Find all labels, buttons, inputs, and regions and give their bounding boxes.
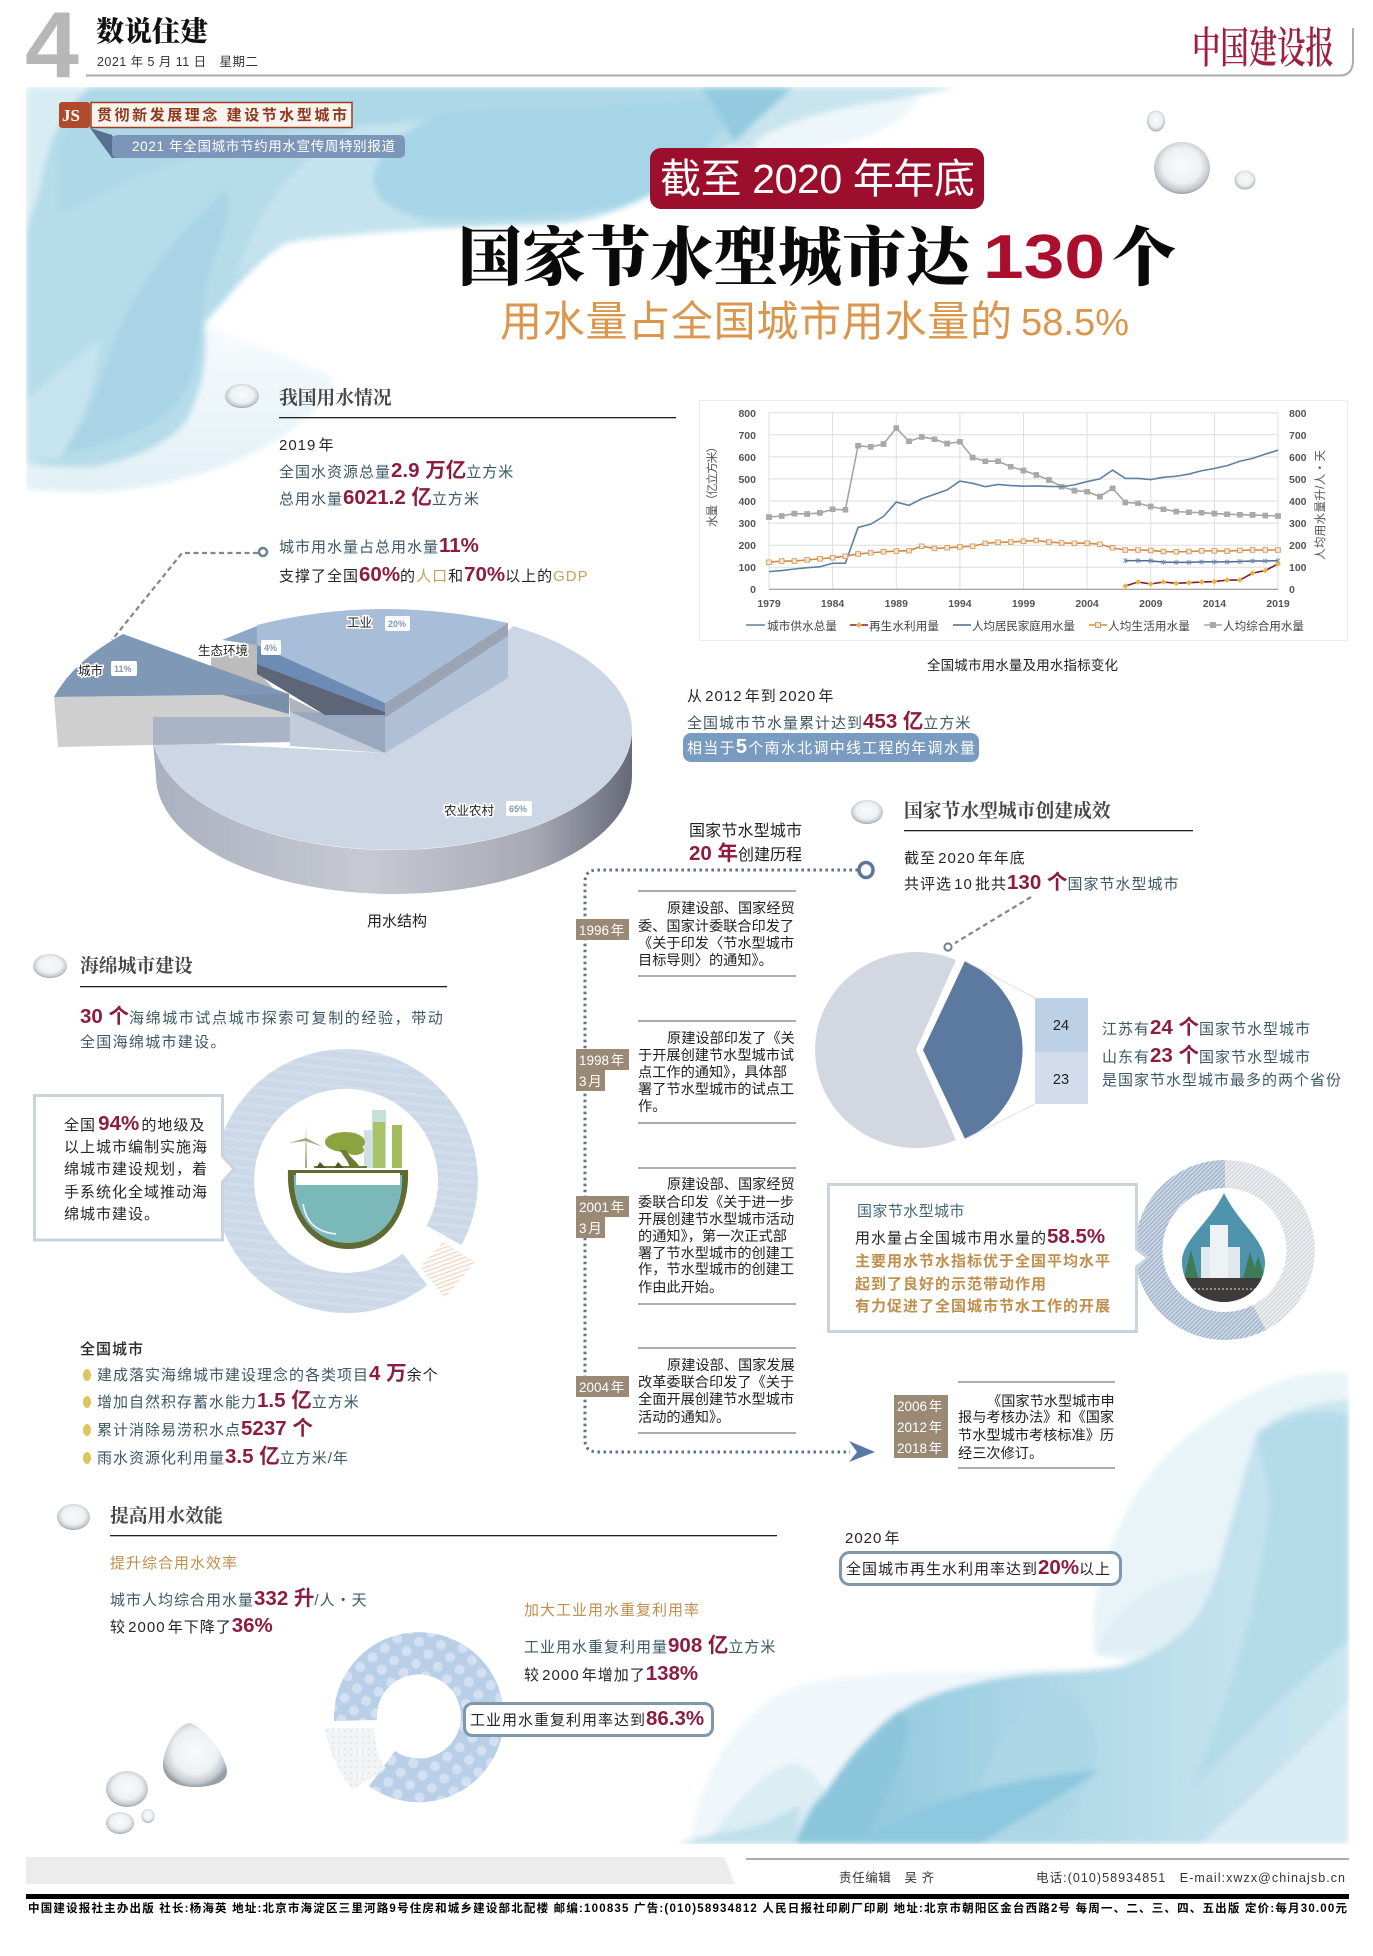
timeline heading: 20 年创建历程: [689, 842, 802, 865]
left axis labels: 100: [738, 562, 756, 574]
province text: 山东有23 个国家节水型城市: [1102, 1044, 1311, 1067]
series: combined per capita: [769, 428, 1278, 517]
entry: 2004: 改革委联合印发了《关于: [638, 1375, 794, 1391]
right axis labels: 700: [1289, 430, 1307, 442]
left axis labels: 300: [738, 518, 756, 530]
entry: 1996: 1996 年: [579, 923, 624, 938]
left axis labels: 400: [738, 496, 756, 508]
series: household: [1125, 561, 1278, 562]
text: national cities: 全国城市: [80, 1340, 144, 1358]
section name: 数说住建: [96, 10, 208, 50]
chip: city: [111, 661, 137, 676]
title: [458, 148, 1176, 345]
pie: remainder: [815, 952, 956, 1148]
section rule: [110, 1535, 777, 1536]
left axis labels: 700: [738, 430, 756, 442]
panel: water-saving city results: [815, 796, 1342, 1148]
data series: [769, 428, 1278, 586]
dashed leader: [955, 897, 1031, 943]
series: reclaimed: [1125, 564, 1278, 586]
slice: agriculture: [153, 626, 632, 850]
subtitle number: 58.5%: [1021, 302, 1129, 344]
chip: ecology: 4%: [264, 643, 277, 653]
per capita text: 城市人均综合用水量332 升/人・天: [110, 1587, 368, 1610]
left axis labels: [738, 408, 756, 596]
box text: 有力促进了全国城市节水工作的开展: [855, 1297, 1111, 1315]
entry: 2001: 原建设部、国家经贸: [667, 1176, 795, 1193]
dotted path: [585, 870, 858, 1452]
x axis labels: 2014: [1203, 598, 1226, 610]
right axis labels: [1289, 408, 1307, 596]
JS text: JS: [62, 106, 80, 125]
chip: city: 11%: [114, 664, 132, 674]
selected cities: 共评选 10 批共130 个国家节水型城市: [904, 871, 1179, 894]
timeline heading: [689, 822, 802, 865]
entry: 2006-2018: 《国家节水型城市申: [987, 1393, 1115, 1410]
province text: 江苏有24 个国家节水型城市: [1102, 1016, 1311, 1039]
drops: [106, 1723, 227, 1834]
box text: 全国 94% 的地级及: [64, 1112, 205, 1135]
text: national cities: [80, 1340, 439, 1468]
sub banner text: 2021 年全国城市节约用水宣传周特别报道: [132, 138, 395, 154]
slice: city: [54, 634, 289, 697]
box text: 以上城市编制实施海: [64, 1139, 208, 1156]
x axis labels: 1984: [821, 598, 844, 610]
entry: 1996: 委、国家计委联合印发了: [638, 918, 794, 935]
entry: 2004: 活动的通知》。: [638, 1409, 730, 1426]
entry: 1996: [576, 890, 796, 977]
entry: 2004: [576, 1347, 796, 1434]
text: national cities: 雨水资源化利用量3.5 亿立方米/年: [97, 1445, 349, 1468]
legend: 人均居民家庭用水量: [972, 619, 1075, 633]
box text: 绵城市建设规划，着: [64, 1161, 208, 1178]
entry: 1996: 原建设部、国家经贸: [667, 900, 795, 917]
timeline start ring: [859, 862, 873, 878]
intro text: 30 个海绵城市试点城市探索可复制的经验，带动: [80, 1005, 444, 1028]
panel: 58.5%: [828, 1160, 1315, 1340]
panel: reclaimed water: 2020 年: [845, 1530, 901, 1547]
x axis labels: 1979: [757, 598, 781, 610]
chip: industry: 20%: [388, 619, 406, 629]
callout: 工业用水重复利用率达到86.3%: [470, 1707, 704, 1730]
intro text: [80, 1005, 444, 1051]
box text: 手系统化全域推动海: [64, 1183, 208, 1201]
headline number: 130: [983, 223, 1105, 292]
entry: 2006-2018: 2012 年: [897, 1420, 942, 1435]
left axis labels: 800: [738, 408, 756, 420]
pill: equivalent: [683, 733, 979, 762]
section heading: 我国用水情况: [279, 383, 392, 410]
province text: [1102, 1016, 1342, 1089]
grey band: [26, 1857, 735, 1884]
ring: grey: [1225, 1160, 1315, 1330]
series: total supply: [769, 450, 1278, 572]
callout leader: [112, 553, 258, 640]
banner title box: [91, 102, 352, 128]
background waves: top left: [26, 87, 957, 492]
x axis labels: 1999: [1012, 598, 1035, 610]
text block: water saved: 全国城市节水量累计达到453 亿立方米: [687, 710, 971, 733]
text block: water saved: [683, 688, 979, 762]
entry: 1998: [576, 1020, 796, 1124]
legend: [746, 619, 1304, 633]
legend: 再生水利用量: [869, 619, 939, 633]
entry: 1998: 点工作的通知》，具体部: [638, 1064, 787, 1081]
footer: [26, 1857, 1349, 1915]
entry: 2001: 开展创建节水型城市活动: [638, 1211, 794, 1228]
right axis labels: 400: [1289, 496, 1307, 508]
entry: 2001: 委联合印发《关于进一步: [638, 1195, 794, 1211]
panel: reclaimed water: [840, 1530, 1120, 1584]
label: industry: 工业: [347, 616, 372, 630]
box: 24: 24: [1053, 1018, 1069, 1034]
increase text: 较 2000 年增加了138%: [524, 1662, 698, 1685]
entry: 1998: 署了节水型城市的试点工: [638, 1081, 794, 1098]
slice: ecology: [222, 626, 257, 645]
right axis labels: 100: [1289, 562, 1307, 574]
right axis labels: 0: [1289, 584, 1295, 596]
ring: [214, 1049, 478, 1313]
entry: 1998: 原建设部印发了《关: [667, 1031, 795, 1047]
right axis labels: 800: [1289, 408, 1307, 420]
donut: [334, 1632, 504, 1802]
main headline: 国家节水型城市达: [458, 207, 975, 299]
section heading: 海绵城市建设: [80, 951, 193, 978]
series: per capita living: [769, 541, 1278, 562]
panel: water efficiency: [57, 1501, 777, 1834]
entry: 2001: 的通知》，第一次正式部: [638, 1228, 787, 1245]
headline unit: 个: [1112, 207, 1176, 299]
section drop icon: [851, 800, 883, 824]
text: national cities: 建成落实海绵城市建设理念的各类项目4 万余个: [97, 1362, 439, 1385]
x axis labels: 1989: [885, 598, 908, 610]
urban share: 城市用水量占总用水量11%: [279, 534, 479, 557]
entry: 2004: 全面开展创建节水型城市: [638, 1391, 794, 1408]
entry: 2004: 原建设部、国家发展: [667, 1357, 795, 1374]
legend: 人均综合用水量: [1223, 619, 1304, 633]
left axis title: 水量（亿立方米）: [705, 441, 719, 527]
banner title: 贯彻新发展理念 建设节水型城市: [97, 106, 347, 124]
entry: 2001: 3 月: [579, 1221, 602, 1236]
entry: 2001: 作，节水型城市的创建工: [638, 1261, 794, 1278]
icon: city in water drop: [1180, 1193, 1270, 1304]
slice: industry side: [385, 636, 508, 753]
header rule: [86, 28, 1353, 76]
chip: industry: [385, 616, 410, 631]
water drops top right: [1147, 110, 1256, 194]
section drop icon: [33, 954, 67, 978]
text: national cities: 累计消除易涝积水点5237 个: [97, 1417, 313, 1440]
chip: agriculture: [506, 801, 532, 816]
right axis labels: 300: [1289, 518, 1307, 530]
date badge: [650, 148, 984, 209]
donut remainder: [325, 1728, 386, 1790]
leader dot: [944, 943, 952, 951]
text box: [828, 1184, 1148, 1332]
diamond: [420, 1242, 475, 1298]
box: 23: 23: [1053, 1072, 1069, 1088]
entry: 1998: 作。: [638, 1099, 666, 1115]
panel: sponge city: [33, 951, 478, 1468]
reuse text: 工业用水重复利用量908 亿立方米: [524, 1634, 776, 1657]
box: 24: [1035, 998, 1088, 1052]
section heading: 国家节水型城市创建成效: [904, 796, 1111, 823]
timeline heading: 国家节水型城市: [689, 822, 802, 840]
entry: 2001: 作由此开始。: [638, 1280, 723, 1296]
imprint: 中国建设报社主办出版 社长:杨海英 地址:北京市海淀区三里河路9号住房和城乡建设部北配楼 邮编:100835 广告:(010)58934812 人民日报社印刷厂印刷 地址:北京市朝阳区金台西路2号 每周一、二、三、四、五出版 定价:每月30.00元: [28, 1901, 1348, 1915]
slice: city side: [54, 694, 290, 747]
section rule: [279, 417, 676, 418]
pie side: [152, 730, 632, 894]
entry: 1996: 目标导则〉的通知》。: [638, 952, 773, 969]
box text: 用水量占全国城市用水量的58.5%: [855, 1225, 1105, 1248]
label: agriculture: 农业农村: [444, 804, 495, 818]
box: 23: [1035, 1052, 1088, 1104]
section drop icon: [225, 384, 259, 408]
box text: 绵城市建设。: [64, 1206, 160, 1223]
x axis labels: [757, 598, 1290, 610]
timeline: [576, 862, 1115, 1469]
page header: [25, 0, 1353, 97]
entry: 2001: 2001 年: [579, 1200, 624, 1215]
chart frame: [700, 400, 1348, 640]
entry: 2006-2018: 节水型城市考核标准》历: [958, 1427, 1114, 1444]
box text: 主要用水节水指标优于全国平均水平: [855, 1252, 1111, 1270]
date: 2021 年 5 月 11 日 星期二: [97, 55, 258, 69]
JS badge: [59, 102, 90, 128]
chip: ecology: [261, 640, 281, 655]
pill: 全国城市再生水利用率达到20%以上: [846, 1556, 1111, 1579]
x axis labels: 2004: [1075, 598, 1099, 610]
left axis labels: 600: [738, 452, 756, 464]
x axis labels: 2019: [1266, 598, 1290, 610]
entry: 2001: 署了节水型城市的创建工: [638, 1245, 794, 1262]
legend: 人均生活用水量: [1108, 619, 1190, 633]
pill: [840, 1552, 1120, 1584]
reduction text: 较 2000 年下降了36%: [110, 1614, 273, 1637]
total water resource: 全国水资源总量2.9 万亿立方米: [279, 459, 514, 482]
entry: 2006-2018: 2006 年: [897, 1399, 942, 1414]
right axis title: 人均用水量升/人・天: [1314, 450, 1327, 560]
label: ecology: 生态环境: [198, 643, 248, 658]
entry: 2006-2018: [894, 1381, 1115, 1469]
slice: industry: [257, 609, 508, 703]
population and gdp share: 支撑了全国60%的人口和70%以上的GDP: [279, 563, 589, 586]
left axis labels: 0: [750, 584, 756, 596]
subtitle: 用水量占全国城市用水量的: [500, 298, 1012, 345]
sub heading: 提升综合用水效率: [110, 1555, 238, 1572]
label: city: 城市: [78, 663, 103, 678]
text block: water saved: 从 2012 年到 2020 年: [687, 688, 834, 705]
legend: 城市供水总量: [767, 619, 837, 633]
x axis labels: 1994: [948, 598, 972, 610]
text box: [34, 1096, 234, 1240]
callout dot: [259, 548, 267, 556]
contact: 电话:(010)58934851 E-mail:xwzx@chinajsb.cn: [1036, 1871, 1345, 1885]
box text: 起到了良好的示范带动作用: [855, 1275, 1047, 1293]
callout: [464, 1704, 712, 1736]
black bar: [26, 1894, 1349, 1899]
left axis labels: 200: [738, 540, 756, 552]
timeline arrow: [849, 1441, 875, 1462]
editor: 责任编辑 吴 齐: [839, 1870, 935, 1885]
year: 2019 年: [279, 437, 335, 454]
section rule: [80, 986, 447, 987]
entry: 1998: 1998 年: [579, 1053, 624, 1068]
chip: agriculture: 65%: [509, 804, 527, 814]
box text: [64, 1112, 208, 1223]
chart caption: 全国城市用水量及用水指标变化: [927, 657, 1118, 673]
box text: 国家节水型城市: [857, 1203, 965, 1220]
entry: 2004: 2004 年: [579, 1380, 624, 1395]
entry: 2006-2018: 报与考核办法》和《国家: [958, 1409, 1114, 1426]
section heading: 提高用水效能: [110, 1501, 223, 1528]
panel: water use: [112, 383, 676, 640]
pie: top two provinces: [923, 961, 1023, 1139]
pie caption: 用水结构: [367, 913, 427, 930]
ring: blue: [1135, 1160, 1266, 1340]
rule: [746, 1858, 1349, 1860]
background waves: bottom right: [678, 1372, 1349, 1844]
left axis labels: 500: [738, 474, 756, 486]
entry: 2001: [576, 1167, 796, 1305]
section drop icon: [57, 1504, 90, 1530]
axis line: [769, 588, 1278, 590]
newspaper logo: 中国建设报: [1192, 15, 1334, 76]
icon: bowl with green city: [288, 1110, 408, 1249]
entry: 1996: 《关于印发〈节水型城市: [638, 935, 794, 952]
line chart: urban water use: [700, 400, 1348, 673]
sub banner: [112, 135, 405, 158]
connector: [965, 961, 1035, 1139]
right axis labels: 200: [1289, 540, 1307, 552]
section rule: [904, 830, 1193, 831]
entry: 1998: 于开展创建节水型城市试: [638, 1047, 794, 1064]
intro text: 全国海绵城市建设。: [80, 1033, 227, 1051]
3D pie chart: water structure: [54, 609, 632, 930]
date badge text: 截至 2020 年年底: [660, 156, 975, 202]
grid: [769, 413, 1278, 589]
entry: 2006-2018: 2018 年: [897, 1441, 942, 1456]
date: 截至 2020 年年底: [904, 850, 1026, 867]
entry: 1998: 3 月: [579, 1074, 602, 1089]
text: national cities: 增加自然积存蓄水能力1.5 亿立方米: [97, 1389, 360, 1412]
box text: [855, 1203, 1111, 1315]
right axis labels: 600: [1289, 452, 1307, 464]
entry: 2006-2018: 经三次修订。: [958, 1446, 1043, 1462]
right axis labels: 500: [1289, 474, 1307, 486]
banner ribbon fold: [90, 128, 122, 158]
sub heading right: 加大工业用水重复利用率: [524, 1601, 700, 1619]
pill text: 相当于5个南水北调中线工程的年调水量: [687, 736, 975, 758]
total water use: 总用水量6021.2 亿立方米: [279, 486, 480, 509]
special report banner: [59, 102, 405, 158]
x axis labels: 2009: [1139, 598, 1163, 610]
province text: 是国家节水型城市最多的两个省份: [1102, 1072, 1342, 1089]
